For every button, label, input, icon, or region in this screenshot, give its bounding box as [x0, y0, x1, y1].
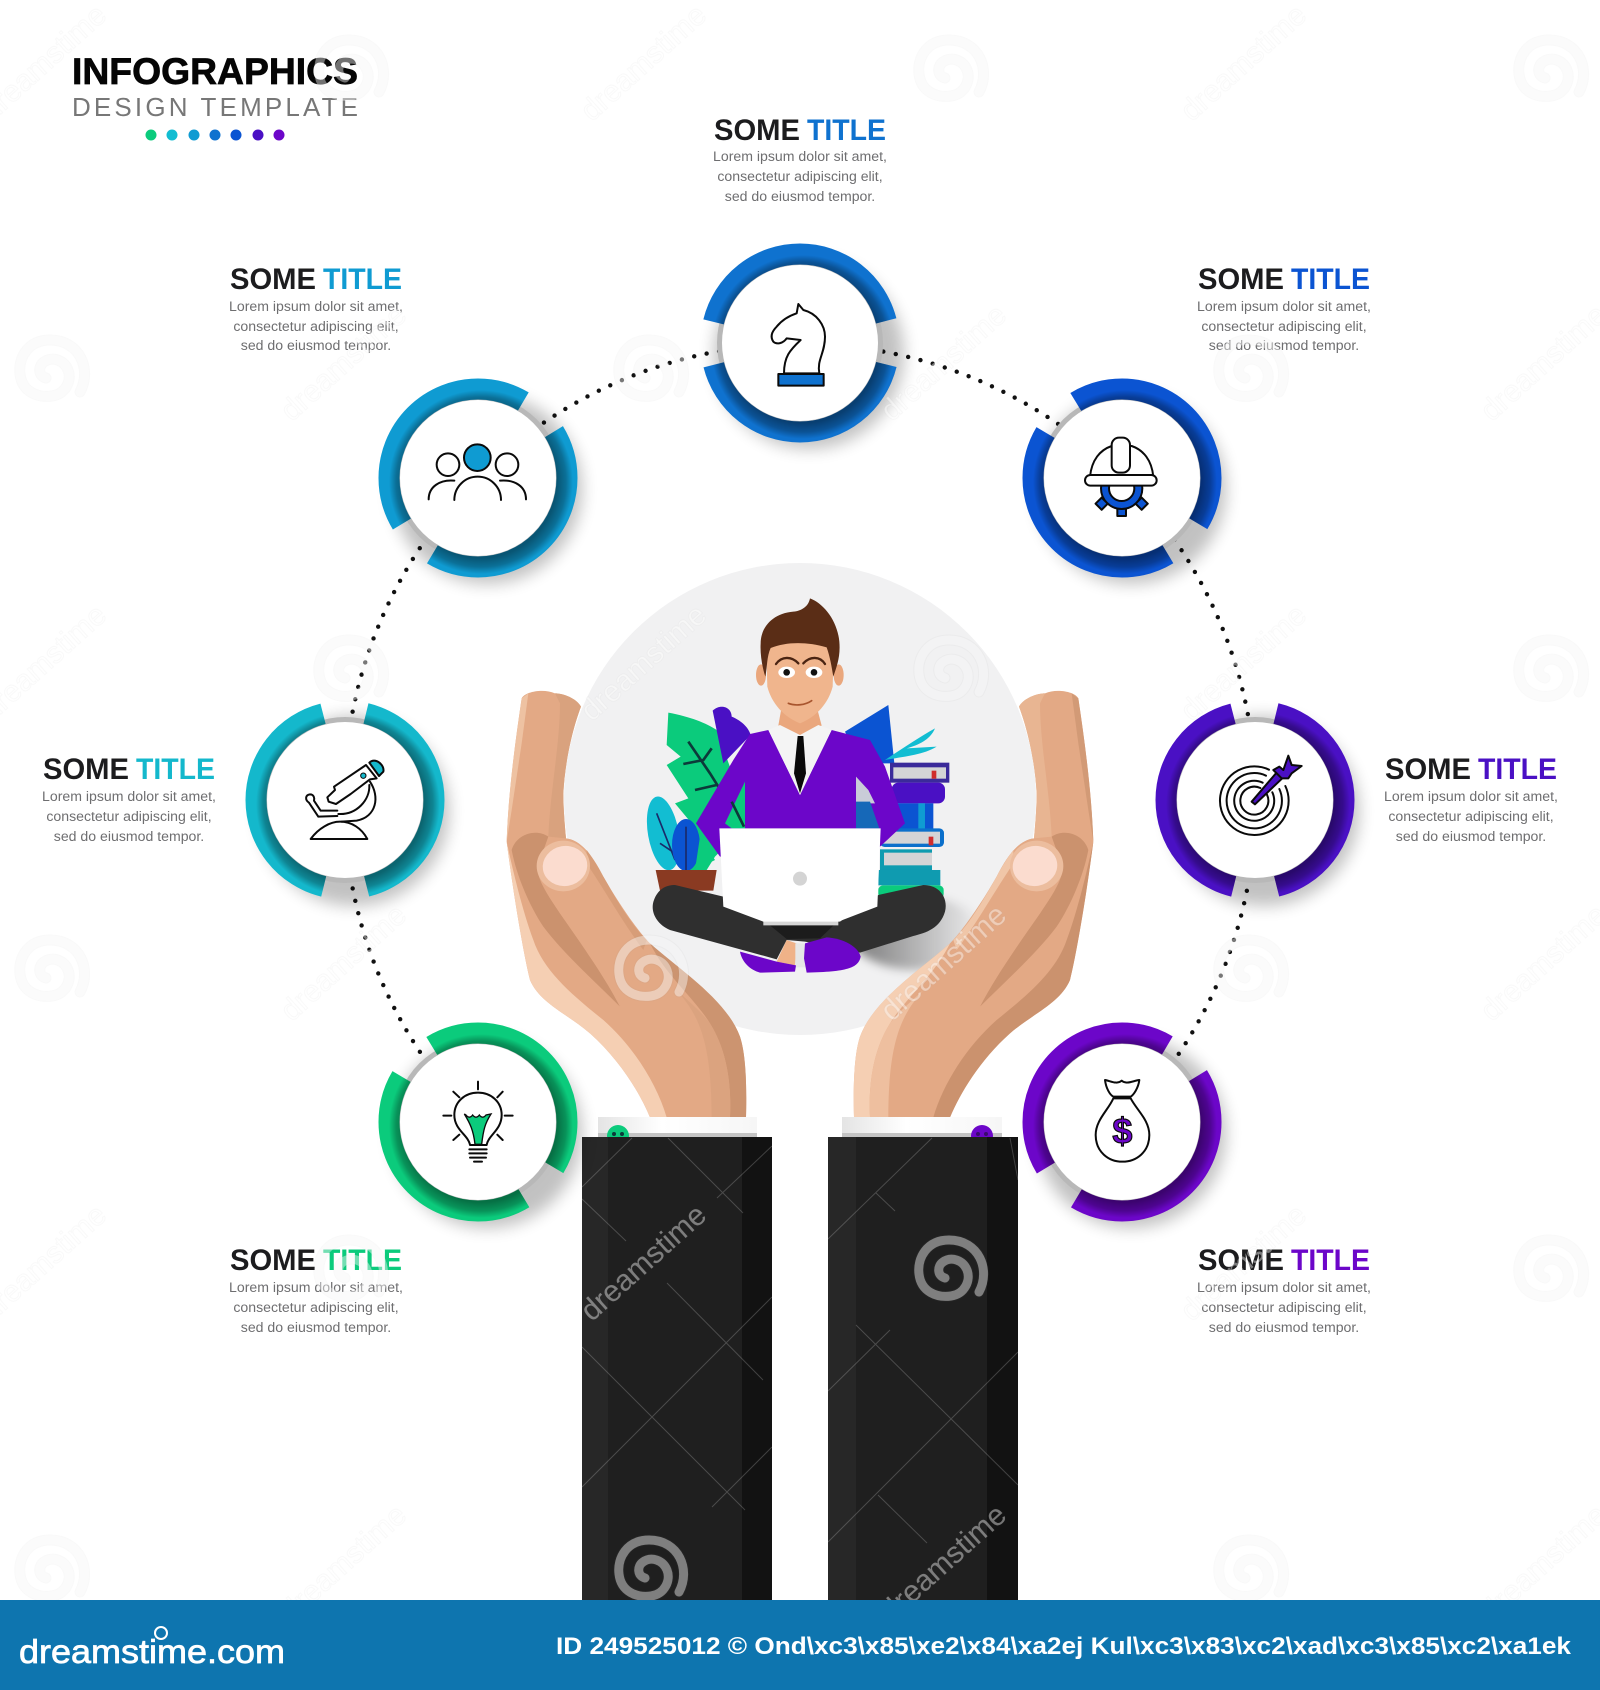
heading: infographics: INFOGRAPHICS: [72, 51, 358, 92]
step: right (target): [1166, 711, 1359, 906]
text block: top: sed do eiusmod tempor.: [725, 188, 875, 204]
tie: [794, 736, 806, 793]
legs: [653, 885, 946, 959]
watermark text: dreamstime: [574, 598, 713, 728]
icon: money bag: $: [1112, 1110, 1132, 1151]
text block: lower right: TITLE: [1291, 1244, 1370, 1277]
footer banner: [0, 1600, 1600, 1690]
text block: lower left: SOME: [230, 1244, 316, 1277]
central grey circle: [564, 563, 1036, 1035]
watermark text: dreamstime: [1174, 1198, 1313, 1328]
step: lower left (light bulb): [389, 1033, 582, 1228]
laptop: [719, 828, 881, 925]
watermark text: dreamstime: [1174, 0, 1313, 128]
jacket: [696, 730, 905, 857]
text block: right: TITLE: [1478, 753, 1557, 786]
text block: lower right: consectetur adipiscing elit,: [1201, 1299, 1367, 1315]
text block: right: SOME: [1385, 753, 1471, 786]
step: lower right (money bag): [1033, 1033, 1226, 1228]
right hand: [854, 691, 1093, 1117]
text block: left: consectetur adipiscing elit,: [46, 808, 212, 824]
step: upper right (hard hat): [1033, 389, 1226, 584]
thumb: [953, 838, 1063, 1007]
footer logo: dreamstime.com: [19, 1633, 285, 1670]
pot: [656, 870, 717, 891]
icon: hard hat with gear: [1085, 438, 1157, 516]
right sleeve: [828, 1137, 1018, 1600]
watermark lines on sleeves: [582, 1138, 1018, 1543]
watermark text: dreamstime: [1174, 598, 1313, 728]
text block: upper right: sed do eiusmod tempor.: [1209, 337, 1359, 353]
text block: upper left: Lorem ipsum dolor sit amet,: [229, 298, 403, 314]
floor shadow: [850, 897, 983, 970]
text block: left: TITLE: [136, 753, 215, 786]
watermark text: dreamstime: [274, 898, 413, 1028]
right cuff: [842, 1117, 1002, 1147]
text block: right: consectetur adipiscing elit,: [1388, 808, 1554, 824]
shirt: [768, 725, 832, 795]
text block: right: sed do eiusmod tempor.: [1396, 828, 1546, 844]
text block: left: SOME: [43, 753, 129, 786]
text block: lower right: SOME: [1198, 1244, 1284, 1277]
text block: top: TITLE: [807, 114, 886, 147]
icon: microscope: [306, 761, 384, 839]
text block: upper right: SOME: [1198, 263, 1284, 296]
text block: left: Lorem ipsum dolor sit amet,: [42, 788, 216, 804]
text block: upper left: SOME: [230, 263, 316, 296]
subheading: design template: DESIGN TEMPLATE: [72, 92, 358, 122]
person with laptop, plants and books: [642, 598, 983, 973]
text block: upper left: sed do eiusmod tempor.: [241, 337, 391, 353]
icon: money bag: [1096, 1080, 1149, 1162]
icon: chess knight: [772, 304, 825, 386]
cuff button: green: [607, 1125, 629, 1147]
icon: team: [429, 444, 526, 500]
feet: [740, 937, 861, 973]
watermark text: dreamstime: [874, 1498, 1013, 1628]
text block: upper right: consectetur adipiscing elit,: [1201, 318, 1367, 334]
step: top (chess knight): [711, 254, 904, 449]
text block: upper right: TITLE: [1291, 263, 1370, 296]
text block: left: sed do eiusmod tempor.: [54, 828, 204, 844]
left sleeve: [582, 1137, 772, 1600]
text block: lower right: [1197, 1244, 1371, 1335]
header: infographics design template: [72, 51, 358, 140]
text block: upper left: TITLE: [323, 263, 402, 296]
colour dots: [146, 130, 284, 140]
text block: lower left: sed do eiusmod tempor.: [241, 1319, 391, 1335]
head: [756, 598, 844, 723]
icon: light bulb: [443, 1082, 513, 1162]
watermark text: dreamstime: [274, 1498, 413, 1628]
text block: lower left: consectetur adipiscing elit,: [233, 1299, 399, 1315]
text block: upper left: [229, 263, 403, 353]
watermark text: dreamstime: [874, 898, 1013, 1028]
dotted connector arc: [344, 344, 1256, 1122]
text block: upper left: consectetur adipiscing elit,: [233, 318, 399, 334]
text block: lower right: sed do eiusmod tempor.: [1209, 1319, 1359, 1335]
book stack: [856, 763, 949, 899]
text block: top: consectetur adipiscing elit,: [717, 168, 883, 184]
icon: target and arrow: [1220, 756, 1302, 835]
text block: lower left: Lorem ipsum dolor sit amet,: [229, 1279, 403, 1295]
text block: top: [713, 114, 887, 204]
watermark text: dreamstime: [574, 1198, 713, 1328]
text block: right: Lorem ipsum dolor sit amet,: [1384, 788, 1558, 804]
gap between left arm and torso: [725, 782, 745, 828]
left hand: [507, 691, 746, 1117]
text block: top: SOME: [714, 114, 800, 147]
footer credit: ID 249525012 © Ond\xc3\x85\xe2\x84\xa2ej Kul\xc3\x83\xc2\xad\xc3\x85\xc2\xa1ek: [556, 1633, 1572, 1660]
neck: [778, 707, 822, 737]
left cuff: [598, 1117, 757, 1147]
text block: top: Lorem ipsum dolor sit amet,: [713, 148, 887, 164]
text block: left: [42, 753, 216, 844]
text block: upper right: Lorem ipsum dolor sit amet,: [1197, 298, 1371, 314]
text block: upper right: [1197, 263, 1371, 353]
watermark text: dreamstime: [874, 298, 1013, 428]
cuff button: purple: [971, 1125, 993, 1147]
watermark text: dreamstime: [574, 0, 713, 128]
text block: lower left: TITLE: [323, 1244, 402, 1277]
text block: lower left: [229, 1244, 403, 1335]
plants: [642, 705, 937, 891]
step: left (microscope): [256, 711, 449, 906]
text block: right: [1384, 753, 1558, 844]
step: upper left (team): [389, 389, 582, 584]
gap between right arm and torso: [856, 777, 879, 828]
thumb: [537, 838, 647, 1007]
watermark text: dreamstime: [274, 298, 413, 428]
text block: lower right: Lorem ipsum dolor sit amet,: [1197, 1279, 1371, 1295]
